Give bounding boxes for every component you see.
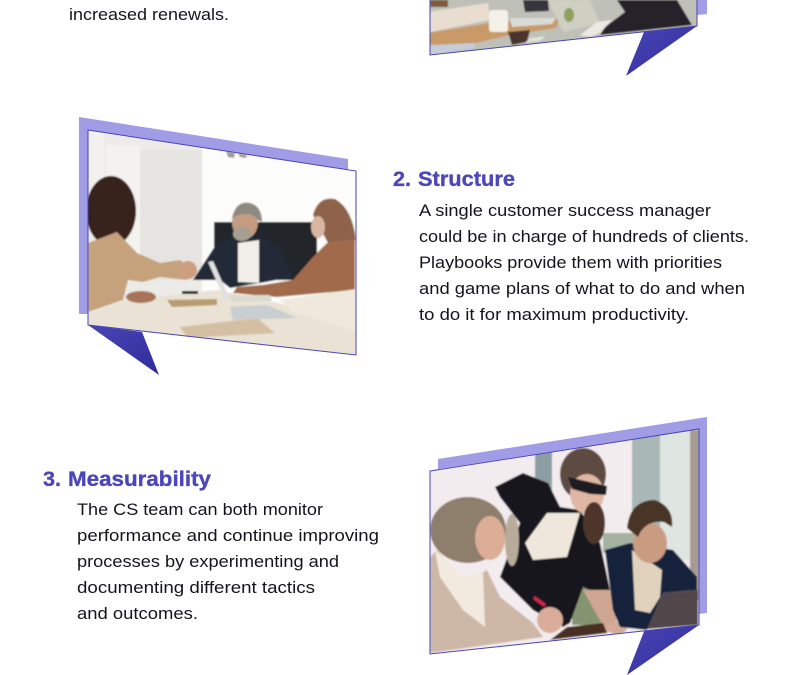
right woman bbox=[313, 199, 356, 243]
left woman bbox=[86, 176, 136, 246]
standing woman bbox=[495, 473, 610, 627]
text block: Measurability body: and outcomes. bbox=[77, 604, 198, 623]
heading: 2. Structure: Structure bbox=[418, 167, 515, 191]
accent: section 3 lilac backing bbox=[438, 417, 707, 614]
table bbox=[550, 623, 607, 640]
text block: Structure body: could be in charge of hundreds of clients. bbox=[419, 227, 749, 246]
seated woman bbox=[430, 550, 543, 653]
table items bbox=[167, 299, 217, 307]
text block: Measurability body: The CS team can both monitor bbox=[77, 500, 323, 519]
text block: end of section 1: increased renewals. bbox=[69, 5, 229, 24]
heading: 2. Structure: 2. bbox=[393, 167, 411, 191]
text block: Structure body bbox=[419, 201, 749, 324]
text block: Measurability body: documenting different tactics bbox=[77, 578, 315, 597]
text block: Measurability body bbox=[77, 500, 379, 623]
text block: Measurability body: processes by experimenting and bbox=[77, 552, 339, 571]
seated man bbox=[605, 543, 697, 630]
icon: section 3 corner triangle bbox=[627, 625, 699, 675]
table bbox=[88, 290, 356, 356]
image: section 2 photo frame bbox=[79, 117, 360, 375]
text block: Structure body: and game plans of what to do and when bbox=[419, 279, 745, 298]
text block: Structure body: to do it for maximum productivity. bbox=[419, 305, 689, 324]
heading: 3. Measurability: 3. bbox=[43, 467, 61, 491]
text block: Structure body: Playbooks provide them with priorities bbox=[419, 253, 722, 272]
accent: section 2 lilac backing bbox=[79, 117, 348, 314]
icon: section 1 corner triangle bbox=[626, 26, 697, 76]
man bbox=[193, 237, 292, 288]
image: section 1 photo frame bbox=[425, 0, 707, 76]
text block: Measurability body: performance and continue improving bbox=[77, 526, 379, 545]
heading: 3. Measurability: Measurability bbox=[68, 467, 211, 491]
text block: Structure body: A single customer success manager bbox=[419, 201, 711, 220]
image: section 3 photo frame bbox=[428, 417, 707, 675]
icon: section 2 corner triangle bbox=[88, 325, 159, 375]
